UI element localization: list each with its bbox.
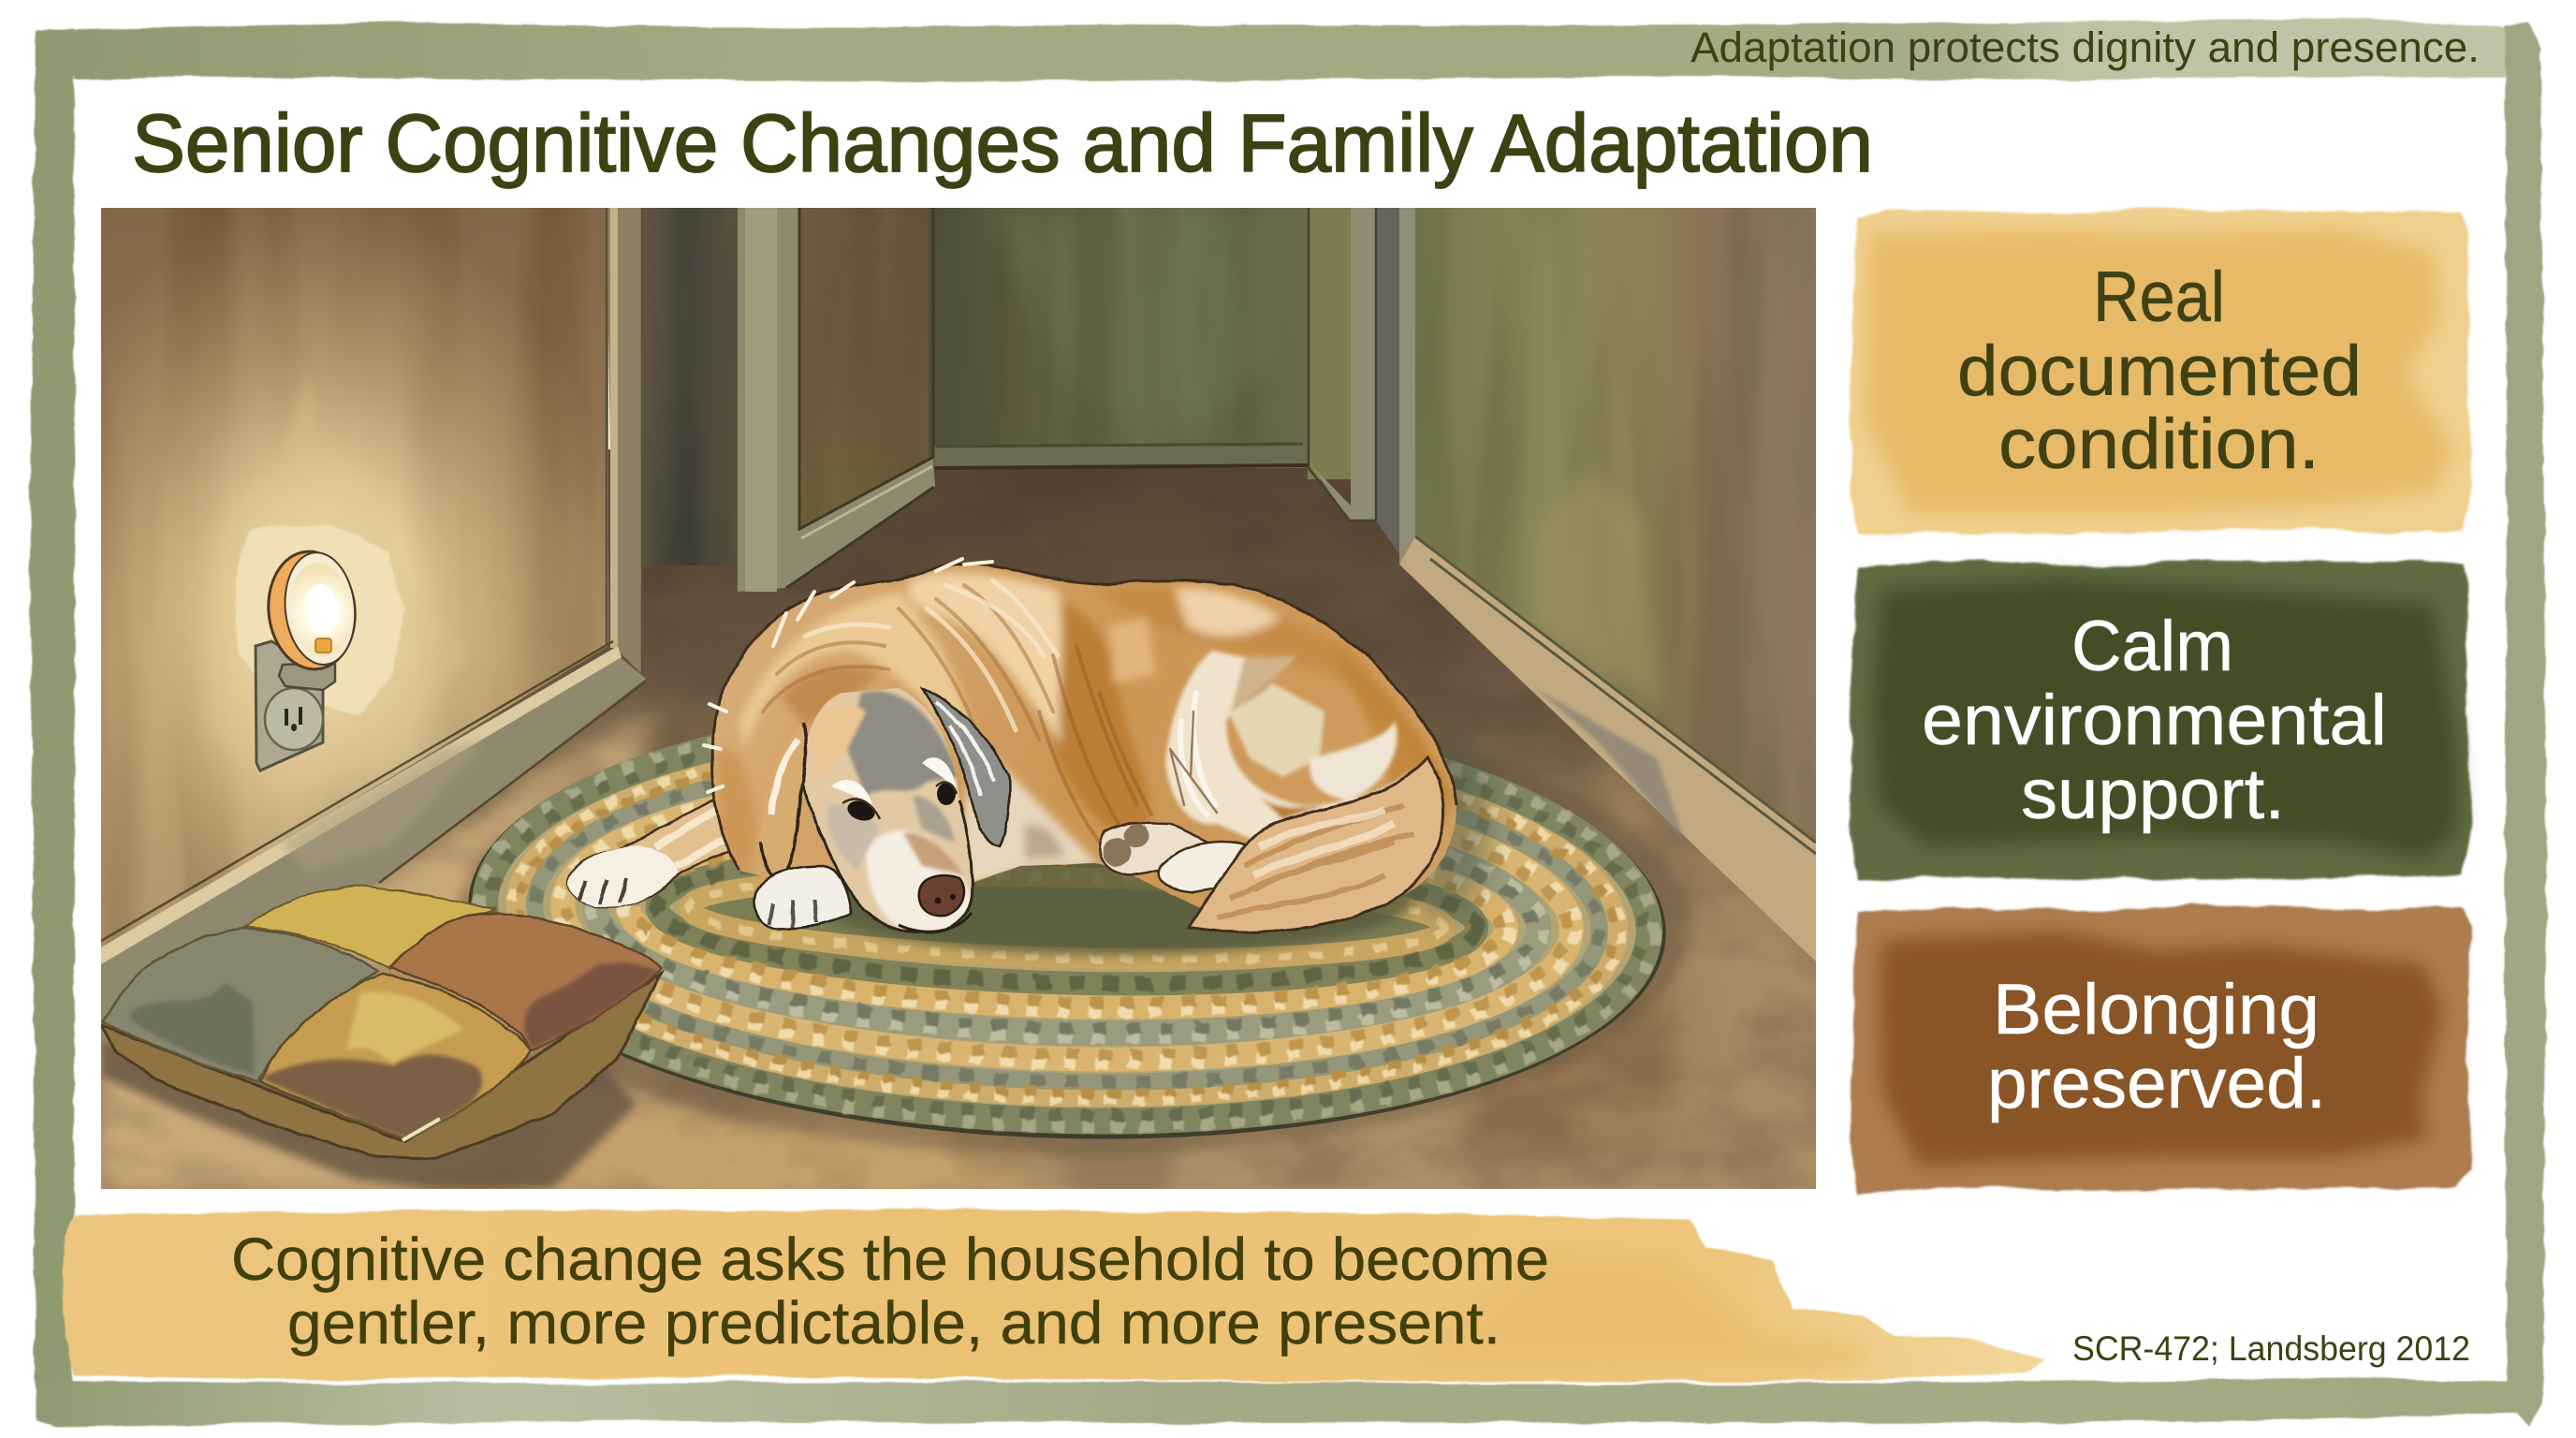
dog eyes <box>842 783 957 824</box>
source citation: SCR-472; Landsberg 2012 <box>2072 1329 2470 1368</box>
dog body outline <box>711 565 1456 871</box>
dog head <box>786 674 983 946</box>
dog hind paws <box>1100 823 1259 892</box>
left baseboard <box>101 641 646 1039</box>
braided rug <box>462 684 1672 1154</box>
dog nose <box>899 875 972 932</box>
dog muzzle outline <box>800 777 972 932</box>
dog brows <box>831 757 957 805</box>
pillow <box>101 886 661 1189</box>
dog <box>567 559 1460 946</box>
card text: environmental <box>1922 681 2387 760</box>
dog front paw <box>754 866 852 929</box>
card wash <box>1850 904 2471 1194</box>
dog tail <box>1189 758 1443 932</box>
dog foreleg <box>567 796 763 907</box>
card wash <box>1851 208 2471 534</box>
card text: preserved. <box>1987 1044 2326 1123</box>
patch yellow <box>245 886 496 969</box>
dog fur strands <box>763 580 1217 843</box>
rug colored rings <box>480 699 1654 1136</box>
lamp sensor <box>315 638 331 653</box>
band darker wash <box>1404 1245 1872 1369</box>
band text: Cognitive change asks the household to become <box>231 1225 1549 1293</box>
rug shade under dog <box>814 846 1413 955</box>
back wall <box>929 208 1310 468</box>
illustration: senior dog resting on a braided rug in a hallway <box>101 208 1816 1208</box>
dog body <box>711 565 1460 929</box>
lamp disc <box>263 548 360 673</box>
pillow patch shading <box>131 962 658 1144</box>
dog fur washes <box>716 573 1460 889</box>
rug shadow <box>454 698 1690 1155</box>
title: Senior Cognitive Changes and Family Adaptation <box>132 98 1873 189</box>
dog left ear <box>760 723 806 879</box>
band wash <box>62 1210 2047 1382</box>
card text: condition. <box>1998 404 2320 484</box>
outlet and night light <box>256 548 360 770</box>
panel: belonging preserved <box>1850 904 2471 1194</box>
card text: support. <box>2021 755 2285 834</box>
rug braid texture <box>474 694 1661 1141</box>
card text: documented <box>1957 331 2362 411</box>
left door <box>738 208 935 592</box>
card text <box>1922 607 2387 834</box>
pillow shadow <box>101 1039 637 1189</box>
card text: Real <box>2093 257 2225 337</box>
band text: gentler, more predictable, and more present. <box>287 1289 1500 1357</box>
band text <box>231 1225 1549 1357</box>
panel: real documented condition <box>1851 208 2471 534</box>
card text <box>1957 257 2362 484</box>
pillow side <box>101 974 661 1159</box>
left wall <box>101 208 608 952</box>
patch green <box>103 929 377 1081</box>
patch brown <box>389 914 661 1050</box>
dog haunch ruff <box>1165 651 1413 843</box>
dog right ear <box>922 688 1009 847</box>
dog head washes <box>786 674 983 946</box>
top-right note: Adaptation protects dignity and presence. <box>1690 23 2480 71</box>
pillow corner seam <box>402 1119 440 1140</box>
hallway recess <box>643 208 738 565</box>
card text <box>1987 970 2326 1123</box>
dog fur flicks <box>704 559 992 792</box>
outlet plate <box>256 641 323 770</box>
card text: Belonging <box>1993 970 2320 1049</box>
right door <box>1308 208 1415 565</box>
panel: calm environmental support <box>1850 560 2471 880</box>
card text: Calm <box>2071 607 2233 686</box>
plug base <box>279 663 335 690</box>
bottom statement band <box>62 1210 2047 1382</box>
card wash <box>1850 560 2471 880</box>
patch gold <box>260 974 532 1139</box>
floor <box>101 449 1816 1208</box>
left door trim <box>607 208 642 674</box>
right wall <box>1399 208 1816 961</box>
